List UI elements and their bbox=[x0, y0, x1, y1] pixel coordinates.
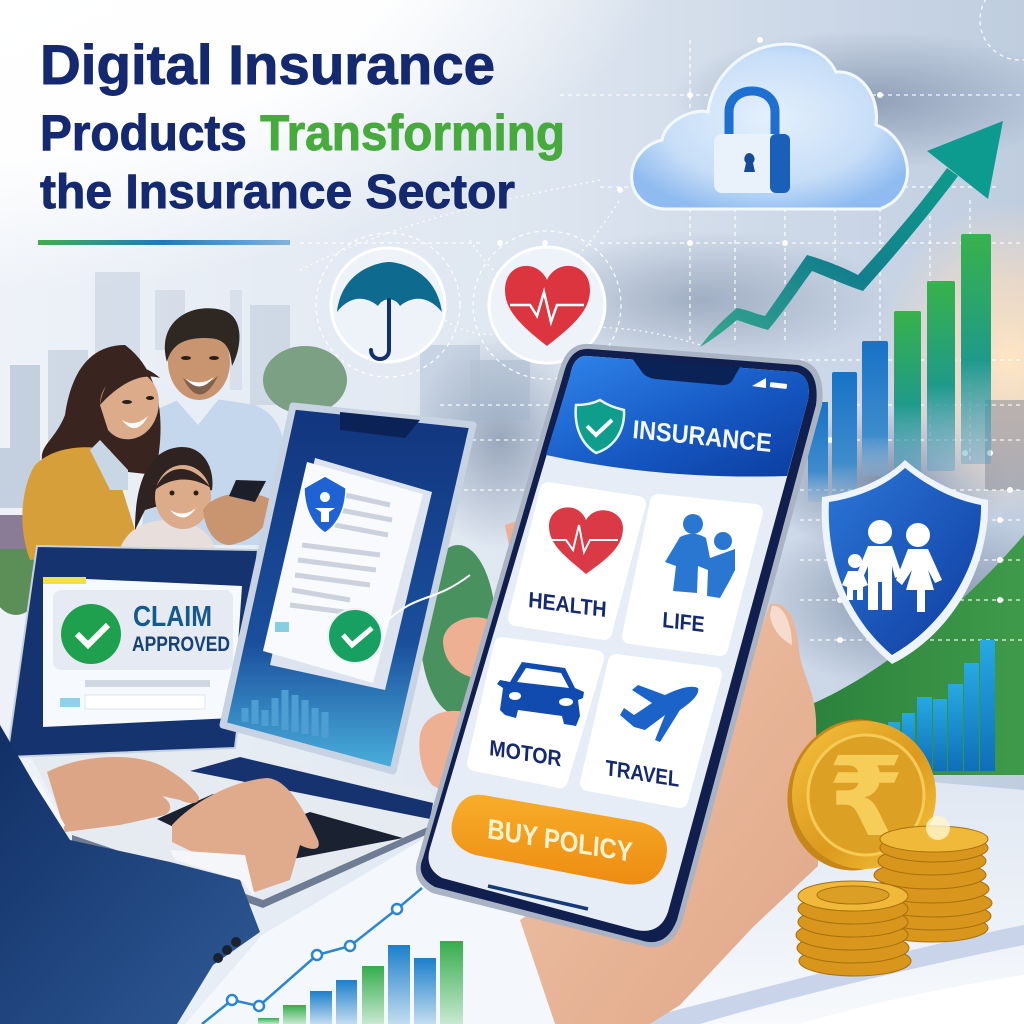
phone body bbox=[416, 344, 823, 947]
gold rupee coin bbox=[771, 704, 941, 886]
right stack bbox=[874, 826, 992, 942]
card: health: HEALTH bbox=[528, 587, 607, 622]
man bbox=[140, 308, 286, 545]
businessman hands and suit bbox=[0, 725, 319, 1024]
bar chart: small blue bars bbox=[888, 640, 995, 771]
title underline bbox=[38, 240, 290, 245]
left stack bbox=[796, 881, 911, 976]
title bbox=[40, 33, 565, 219]
table surface right bbox=[600, 770, 1024, 1024]
home indicator bbox=[488, 886, 588, 909]
buy policy button bbox=[451, 795, 667, 884]
icon: shield check bbox=[576, 400, 624, 453]
gold rupee coin: ₹ bbox=[828, 733, 904, 861]
main smartphone bbox=[416, 344, 823, 947]
icon: small shield bbox=[304, 476, 346, 533]
app header bbox=[546, 356, 809, 477]
bottom line and bar chart bbox=[185, 835, 590, 1024]
buy policy button: BUY POLICY bbox=[487, 812, 634, 868]
card: motor: MOTOR bbox=[489, 735, 562, 771]
family illustration bbox=[22, 308, 286, 560]
icon: family shield bbox=[822, 460, 988, 664]
card: health bbox=[516, 490, 638, 632]
data grid network bbox=[300, 0, 1024, 640]
faded city skyline bbox=[0, 272, 1024, 508]
title: Digital Insurance bbox=[40, 33, 495, 96]
gold coin stacks bbox=[796, 816, 992, 976]
documents bbox=[263, 458, 432, 690]
icon: green check bbox=[61, 604, 121, 664]
grid node dots bbox=[497, 37, 1013, 643]
laptop base and keyboard bbox=[30, 745, 440, 908]
icon: heart badge bbox=[489, 247, 605, 363]
insurance heading: INSURANCE bbox=[632, 414, 773, 458]
card: travel: TRAVEL bbox=[605, 755, 680, 792]
laptop screen with claim approved card bbox=[7, 546, 258, 757]
card: travel bbox=[588, 662, 714, 800]
card: motor bbox=[475, 645, 596, 780]
growth arrow bbox=[700, 121, 1003, 347]
tablet with policy documents bbox=[223, 406, 473, 771]
title: the Insurance Sector bbox=[40, 166, 515, 219]
title: Products Transforming bbox=[40, 105, 565, 161]
background trees and greenery left bbox=[0, 346, 496, 715]
icon: document check bbox=[328, 609, 382, 663]
child bbox=[120, 447, 215, 548]
claim approved text: APPROVED bbox=[132, 633, 230, 656]
woman bbox=[22, 345, 161, 560]
claim approved text bbox=[132, 601, 230, 656]
bar chart: growth bars bbox=[808, 234, 991, 502]
icon: umbrella badge bbox=[331, 248, 445, 362]
phone in hand bbox=[203, 493, 272, 545]
hand holding phone bbox=[419, 520, 818, 1024]
icon: cloud with padlock bbox=[632, 44, 907, 209]
card: life bbox=[630, 502, 755, 648]
green hill right bbox=[790, 535, 1024, 775]
claim approved text: CLAIM bbox=[133, 601, 212, 633]
phone screen bbox=[428, 356, 809, 931]
card: life: LIFE bbox=[662, 607, 705, 637]
